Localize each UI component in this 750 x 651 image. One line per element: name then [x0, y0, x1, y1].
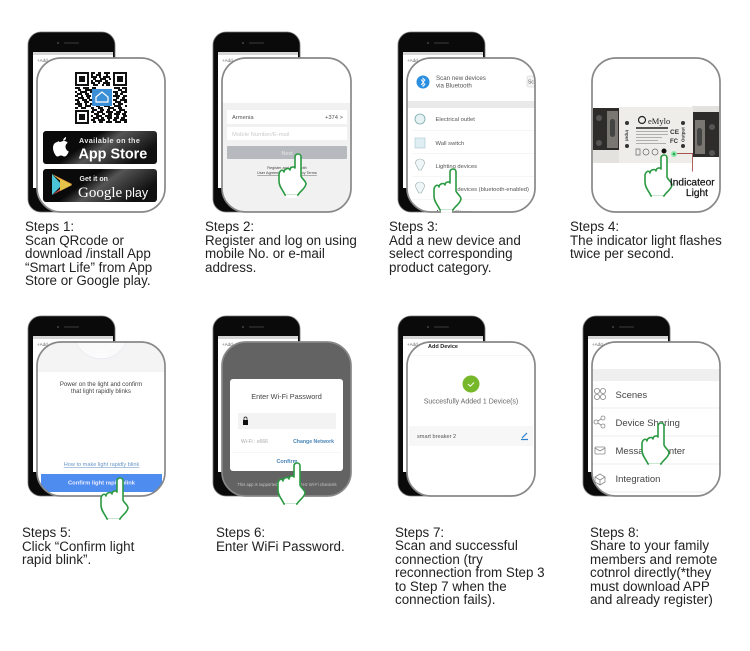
card: step 3: Lighting devices (bluetooth-enabled)	[436, 187, 529, 193]
text: step 7: to Step 7 when the	[395, 579, 507, 594]
icon: bluetooth	[416, 76, 430, 88]
dialog: Enter Wi-Fi Password	[251, 392, 322, 401]
icon: share	[594, 416, 605, 428]
card: step 6	[222, 342, 351, 496]
card: step 8: Device Sharing	[616, 418, 680, 429]
badge: App Store: App Store	[78, 146, 147, 162]
phone: step 7	[398, 316, 485, 496]
card: step 5: Confirm light rapid blink	[68, 480, 136, 486]
card outline: step 7	[407, 342, 535, 496]
card: step 8: Message Center	[616, 446, 685, 457]
icon: apple	[53, 137, 69, 156]
device photo: FC	[670, 139, 679, 145]
text: step 5: Steps 5:	[22, 525, 71, 540]
text: step 4: twice per second.	[570, 246, 674, 261]
dialog	[230, 379, 343, 471]
text: step 2: address.	[205, 260, 256, 275]
device photo: Output	[680, 127, 686, 142]
card outline: step 4	[592, 58, 720, 212]
card: step 3: Lighting devices	[436, 164, 477, 170]
card: step 4	[593, 106, 720, 172]
card: step 2: Mobile Number/E-mail	[232, 132, 289, 138]
text: step 5: rapid blink”.	[22, 552, 91, 567]
text: step 3: Steps 3:	[389, 219, 438, 234]
text: step 8: members and remote	[590, 552, 717, 567]
card outline: step 1	[37, 58, 165, 212]
label: indicator light: Light	[686, 188, 708, 199]
text: step 6: Enter WiFi Password.	[216, 539, 345, 554]
phone: step 3	[398, 32, 485, 212]
icon: play triangle	[52, 174, 72, 195]
panel: step 6	[213, 316, 351, 505]
dialog: Change Network	[293, 439, 334, 445]
text: step 3: Add a new device and	[389, 233, 521, 248]
panel: step 8	[583, 316, 720, 496]
card: step 5: that light rapidly blinks	[71, 388, 131, 395]
icon: wall switch	[415, 138, 425, 148]
text: step 2: Steps 2:	[205, 219, 254, 234]
text: step 1: Scan QRcode or	[25, 233, 125, 248]
text: step 1: “Smart Life” from App	[25, 260, 152, 275]
card: step 2: +374 >	[325, 115, 344, 121]
card: step 8	[592, 342, 720, 496]
card: step 8: Scenes	[616, 390, 647, 401]
leader line	[677, 154, 692, 172]
icon: hand	[642, 423, 669, 465]
card: step 6: This app is supported only for 2.4GHz Wi-Fi channels	[237, 482, 337, 487]
dialog: Confirm	[276, 459, 298, 465]
icon: message	[595, 447, 605, 454]
text: step 8: must download APP	[590, 579, 710, 594]
text: step 7: connection (try	[395, 552, 483, 567]
text: step 2: mobile No. or e-mail	[205, 246, 325, 261]
text: step 1: Store or Google play.	[25, 273, 151, 288]
text: step 6: Steps 6:	[216, 525, 265, 540]
text: step 7: Scan and successful	[395, 538, 518, 553]
phone: step 2	[213, 32, 300, 212]
panel: step 3	[398, 32, 537, 216]
phone: step 1	[28, 32, 115, 212]
icon: integration	[595, 474, 605, 485]
button: confirm	[41, 474, 162, 492]
card: step 2	[222, 58, 351, 212]
badge: Google play: Googleplay	[78, 185, 149, 201]
card: step 5: Power on the light and confirm	[60, 381, 142, 388]
icon: hand	[279, 154, 306, 196]
text: step 2: Register and log on using	[205, 233, 357, 248]
device photo: CE	[670, 129, 680, 136]
card: step 2: Next	[281, 151, 293, 157]
card: step 7	[407, 342, 535, 496]
icon: pencil	[521, 433, 528, 440]
text: step 3: select corresponding	[389, 246, 513, 261]
icon: success check	[462, 376, 480, 392]
card: step 2: Register and log in with	[267, 166, 307, 170]
icon: hand	[101, 478, 128, 520]
badge: Google play: Get it on	[80, 176, 108, 183]
phone: step 6	[213, 316, 300, 496]
card outline: step 8	[592, 342, 720, 496]
card: step 7: smart breaker 2	[417, 434, 456, 440]
text: step 1: Steps 1:	[25, 219, 74, 234]
icon: hand	[278, 463, 305, 505]
card outline: step 5	[37, 342, 165, 496]
panel: step 4	[592, 58, 720, 212]
dialog: Wi-Fi : e666	[241, 439, 268, 445]
button: next	[227, 146, 347, 159]
card outline: step 3	[407, 58, 535, 212]
phone: step 8	[583, 316, 670, 496]
card outline: step 6	[222, 342, 351, 496]
card: step 5: How to make light rapidly blink	[64, 462, 139, 468]
device photo: Input	[624, 130, 630, 141]
text: step 7: Steps 7:	[395, 525, 444, 540]
text: step 3: product category.	[389, 260, 491, 275]
icon: bulb bluetooth	[416, 182, 424, 193]
panel: step 2	[213, 32, 351, 212]
icon: hand	[434, 169, 461, 211]
text: step 8: Steps 8:	[590, 525, 639, 540]
card: step 3: Scan new devices	[436, 75, 486, 82]
card: step 3: Electrical outlet	[436, 117, 475, 123]
card: step 5	[38, 342, 164, 496]
text: step 8: cotnrol directly(*they	[590, 565, 712, 580]
card: step 3: Sc	[528, 80, 534, 86]
panel: step 7	[398, 316, 535, 496]
card: step 7: Add Device	[428, 344, 458, 350]
icon: bulb	[416, 159, 424, 170]
card: step 8: Integration	[616, 474, 660, 485]
card: step 2: User Agreement and Privacy Terms	[257, 171, 317, 175]
badge: App Store	[43, 131, 157, 164]
card: step 3: Air conditioner	[436, 210, 473, 216]
icon: scenes	[594, 388, 606, 400]
card: step 1	[37, 58, 165, 212]
device photo	[593, 106, 720, 163]
text: step 5: Click “Confirm light	[22, 539, 135, 554]
card: step 3	[407, 58, 537, 216]
panel: step 1	[28, 32, 165, 212]
QR code	[75, 73, 127, 123]
text: step 7: connection fails).	[395, 592, 495, 607]
text: step 8: and already register)	[590, 592, 713, 607]
icon: hand	[645, 155, 672, 197]
device photo: eMylo	[648, 116, 670, 126]
text: step 4: Steps 4:	[570, 219, 619, 234]
card: step 7: Succesfully Added 1 Device(s)	[424, 398, 518, 406]
icon: outlet	[415, 114, 425, 124]
card: step 3: Wall switch	[436, 141, 464, 147]
badge: App Store: Available on the	[79, 136, 140, 145]
panel: step 5	[28, 305, 165, 520]
phone: step 5	[28, 316, 115, 496]
text: step 1: download /install App	[25, 246, 151, 261]
text: step 4: The indicator light flashes	[570, 233, 722, 248]
label: indicator light: Indicateor	[670, 178, 715, 188]
badge: Google play	[43, 169, 157, 202]
card: step 2: Armenia	[232, 115, 254, 121]
text: step 8: Share to your family	[590, 538, 709, 553]
card: step 3: via Bluetooth	[436, 82, 472, 90]
card outline: step 2	[222, 58, 351, 212]
text: step 7: reconnection from Step 3	[395, 565, 545, 580]
